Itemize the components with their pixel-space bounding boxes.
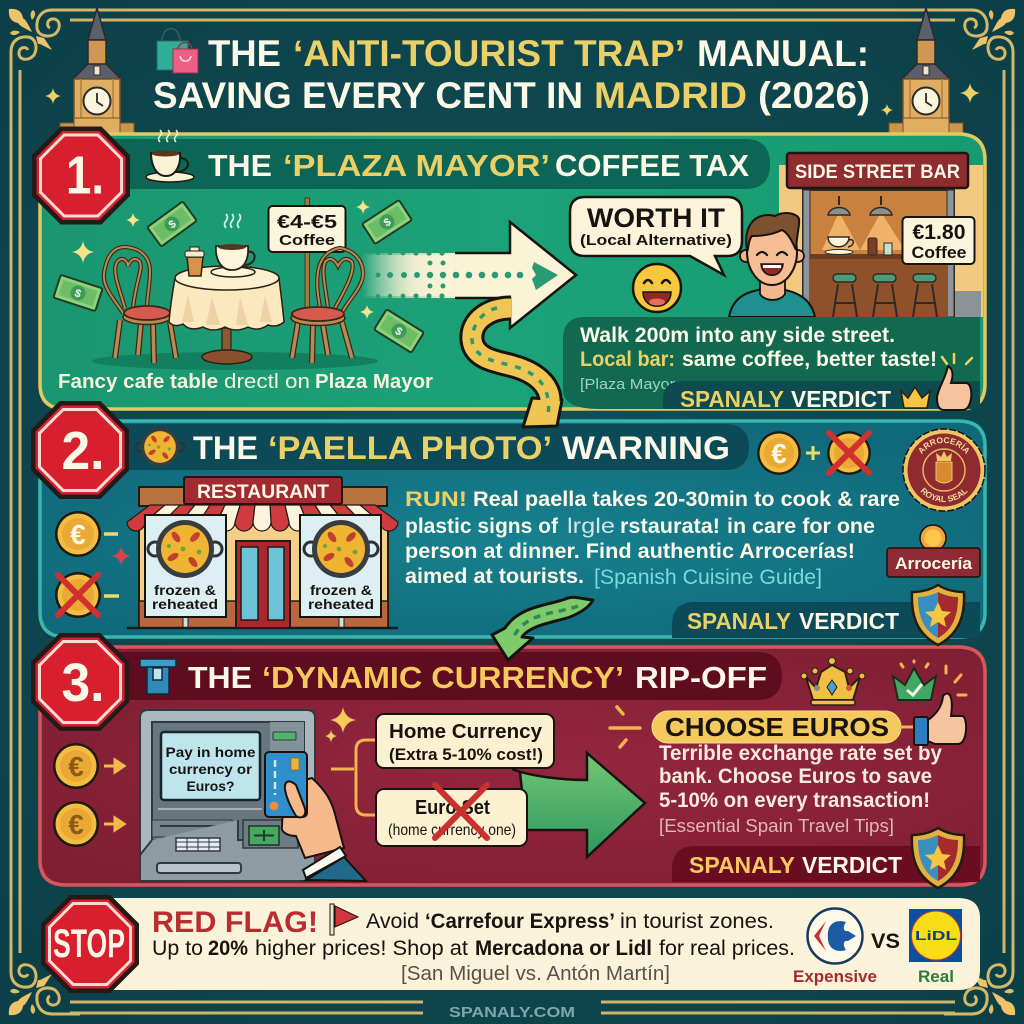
takeaway cup <box>185 247 204 276</box>
panel 1: Plaza Mayor coffee tax <box>40 130 985 412</box>
panel 3: dynamic currency rip-off <box>40 647 985 888</box>
warning body text: plastic signs of <box>405 515 559 538</box>
source citation: [Plaza Mayor <box>580 376 675 393</box>
hand with bank card <box>265 752 366 881</box>
price tag: 1.80 euro coffee: Coffee <box>912 243 966 262</box>
Carrefour logo <box>808 908 862 964</box>
red flag text: 20% <box>208 937 248 960</box>
verdict bar: VERDICT <box>799 608 899 634</box>
label: real: Real <box>918 968 954 986</box>
option: home currency <box>376 714 554 768</box>
poster: frozen and reheated right: frozen & <box>310 582 372 598</box>
versus label: VS <box>871 930 900 953</box>
panel 2 background <box>40 421 985 637</box>
sparkles <box>72 200 374 319</box>
coffee cup on table <box>211 214 255 277</box>
arroceria medal <box>920 525 946 551</box>
ground shadow <box>92 352 378 370</box>
euro coins with arrows: € <box>68 809 84 840</box>
royal seal badge: ROYAL SEAL <box>920 488 968 502</box>
title: ‘ANTI-TOURIST TRAP’ <box>293 33 685 74</box>
poster: frozen and reheated right: reheated <box>308 596 374 612</box>
red flag text: ‘Carrefour Express’ <box>425 910 615 933</box>
panel 1 heading: COFFEE TAX <box>555 148 749 183</box>
floating money bills <box>53 200 424 353</box>
icon: thumbs up <box>937 354 972 410</box>
advice text: same coffee, better taste! <box>682 348 937 371</box>
Lidl logo: LiDL <box>915 928 957 943</box>
panel 3 heading: ‘DYNAMIC CURRENCY’ <box>262 660 624 695</box>
advice text: Local bar: <box>580 348 675 371</box>
icon: shield panel 2 <box>912 585 964 645</box>
number badge 3: 3. <box>62 653 104 713</box>
body text: 5-10% on every transaction! <box>659 789 930 812</box>
option: home currency: (Extra 5-10% cost!) <box>389 745 543 764</box>
ATM screen: Pay in home <box>166 744 256 760</box>
verdict bar <box>663 381 980 412</box>
icon: thumbs up with sleeve <box>914 693 966 745</box>
option: euro crossed out <box>376 785 527 846</box>
cafe table <box>169 266 284 364</box>
red flag text: Mercadona or Lidl <box>475 937 652 960</box>
panel 1 heading strip <box>110 139 770 189</box>
connector lines <box>331 740 376 815</box>
red flag text: higher prices! Shop at <box>255 937 468 960</box>
icon: right clock tower <box>889 8 963 134</box>
number badge 3 <box>32 634 128 730</box>
price sign: 4 to 5 euro coffee: Coffee <box>279 232 335 249</box>
corner ornament: bottom right <box>944 944 1015 1015</box>
panel 3 heading strip <box>110 652 782 700</box>
green arrow <box>512 753 645 857</box>
source citation: [Essential Spain Travel Tips] <box>659 816 894 836</box>
side street bar sign: SIDE STREET BAR <box>795 162 960 183</box>
option: euro crossed out: Euro Set <box>415 797 490 819</box>
icon: shopping bags <box>157 28 198 73</box>
warning body text: RUN! <box>405 488 467 511</box>
title: MADRID <box>594 75 747 116</box>
floating money bills: $ <box>393 325 404 339</box>
option: euro crossed out: (home currency one) <box>388 822 516 839</box>
door <box>236 541 290 628</box>
body text: Terrible exchange rate set by <box>659 742 942 765</box>
source citation: [Spanish Cuisine Guide] <box>594 566 822 589</box>
price tag: 1.80 euro coffee <box>902 217 974 264</box>
ATM screen <box>161 732 260 800</box>
royal seal badge <box>902 428 986 512</box>
red sparkle <box>112 546 130 566</box>
euro coins with arrows <box>53 743 124 847</box>
panel 3 heading: THE <box>188 660 252 695</box>
panel 2 heading: WARNING <box>562 430 730 466</box>
title: (2026) <box>758 75 870 116</box>
panel 2: paella photo warning <box>38 419 987 639</box>
corner ornament: bottom left <box>9 944 80 1015</box>
warning body text: Real paella takes 20-30min to cook & rare <box>473 488 900 511</box>
warning body text: lrgle <box>567 515 615 538</box>
restaurant illustration <box>127 487 398 628</box>
poster: frozen and reheated right <box>300 515 381 617</box>
verdict bar <box>672 846 980 882</box>
footer website: SPANALY.COM <box>449 1004 575 1021</box>
sparkles <box>325 707 356 742</box>
option: home currency: Home Currency <box>389 721 543 743</box>
title: SAVING EVERY CENT IN <box>153 75 583 116</box>
left chair <box>104 247 176 363</box>
panel 2 heading: THE <box>193 430 258 466</box>
red flag text: in tourist zones. <box>620 910 774 933</box>
warning body text: aimed at tourists. <box>405 565 584 588</box>
floating money bills: $ <box>73 287 82 301</box>
panel 3 heading: RIP-OFF <box>635 660 767 695</box>
euro coin with dash <box>55 511 118 557</box>
Lidl logo <box>909 909 962 962</box>
floating money bills: $ <box>167 218 179 231</box>
restaurant sign: RESTAURANT <box>197 482 329 503</box>
poster: frozen and reheated left: reheated <box>152 596 218 612</box>
winding road arrow: plaza to side street <box>472 308 562 427</box>
arroceria label <box>887 548 980 577</box>
number badge 2: 2. <box>62 421 104 481</box>
number badge 1: 1. <box>66 146 104 206</box>
panel 1 heading <box>208 148 749 183</box>
corner ornament: top right <box>944 9 1015 80</box>
panel 2 heading <box>193 430 730 466</box>
speech bubble: worth it <box>570 197 742 275</box>
right chair <box>291 248 363 363</box>
icon: gold crown <box>801 658 865 705</box>
warning body text <box>405 488 900 588</box>
panel 2 heading: ‘PAELLA PHOTO’ <box>268 430 552 466</box>
icon: shield <box>912 828 964 888</box>
caption: fancy cafe table: Plaza Mayor <box>315 371 433 393</box>
ATM machine <box>140 710 315 881</box>
euro coins with arrows: € <box>68 751 84 782</box>
advice text: Walk 200m into any side street. <box>580 324 895 347</box>
speech bubble: worth it: (Local Alternative) <box>580 232 732 249</box>
icon: smiling emoji <box>633 264 681 312</box>
source citation: [San Miguel vs. Antón Martín] <box>401 963 670 985</box>
verdict bar: SPANALY <box>689 852 795 878</box>
warning body text: person at dinner. Find authentic Arrocerías! <box>405 540 855 563</box>
poster: frozen and reheated left <box>145 515 226 617</box>
icon: heading coffee cup <box>146 130 194 182</box>
stop sign <box>42 896 138 992</box>
label: expensive: Expensive <box>793 968 877 986</box>
advice text box <box>563 317 980 409</box>
stop sign: STOP <box>53 922 125 966</box>
verdict bar: VERDICT <box>791 386 891 412</box>
awning <box>127 505 398 532</box>
speech bubble: worth it: WORTH IT <box>587 203 726 233</box>
price sign: 4 to 5 euro coffee <box>268 198 346 308</box>
side street bar interior <box>803 190 981 317</box>
icon: small ATM heading <box>140 659 176 694</box>
arroceria label: Arrocería <box>895 555 973 573</box>
red flag heading: RED FLAG! <box>152 906 318 939</box>
royal seal badge: ARROCERÍA <box>919 437 969 454</box>
side street bar sign <box>787 153 968 188</box>
warning body text: in care for one <box>727 515 875 538</box>
crossed coin with dash <box>55 572 119 618</box>
body text <box>659 742 942 812</box>
advice text <box>580 324 937 371</box>
verdict bar <box>672 602 980 638</box>
panel 2 heading strip <box>110 424 749 470</box>
verdict bar: SPANALY <box>687 608 791 634</box>
icon: small crown <box>901 387 930 408</box>
price tag: 1.80 euro coffee: €1.80 <box>912 221 966 244</box>
choose euros pill <box>610 707 914 747</box>
side street bar background <box>779 165 983 317</box>
arrow: tourist to local alternative <box>362 222 576 328</box>
choose euros pill: CHOOSE EUROS <box>665 712 889 742</box>
ATM screen: currency or <box>169 761 253 777</box>
caption: fancy cafe table <box>58 371 433 393</box>
icon: paella pan heading <box>136 428 184 466</box>
number badge 1 <box>33 128 129 224</box>
verdict bar: SPANALY <box>680 386 784 412</box>
icon: red flag <box>330 904 358 935</box>
sparkles around towers <box>45 83 980 116</box>
title <box>153 33 870 116</box>
caption: fancy cafe table: Fancy cafe table <box>58 371 218 393</box>
panel 3 background <box>40 647 985 885</box>
number badge 2 <box>32 402 128 498</box>
icon: coin plus crossed coin <box>757 431 871 475</box>
title: MANUAL: <box>697 33 869 74</box>
red flag text <box>152 910 795 960</box>
red flag text: for real prices. <box>659 937 795 960</box>
caption: fancy cafe table: drectl on <box>224 371 310 393</box>
red flag text: Up to <box>152 937 203 960</box>
price sign: 4 to 5 euro coffee: €4-€5 <box>277 212 337 232</box>
ATM screen: Euros? <box>186 778 234 794</box>
panel 1 heading: THE <box>208 148 272 183</box>
bottom red flag banner <box>100 898 980 990</box>
poster: frozen and reheated left: frozen & <box>154 582 216 598</box>
euro coin with dash: € <box>70 519 86 550</box>
restaurant sign <box>184 477 342 504</box>
panel 3 heading <box>188 660 767 695</box>
smiling man <box>729 213 815 317</box>
panel 1 background <box>40 134 985 409</box>
banner background <box>100 898 980 990</box>
floating money bills: $ <box>382 216 393 230</box>
warning body text: rstaurata! <box>620 515 720 538</box>
red flag text: Avoid <box>366 910 419 933</box>
icon: coin plus crossed coin: € <box>771 438 787 469</box>
corner ornament: top left <box>9 9 80 80</box>
panel 1 heading: ‘PLAZA MAYOR’ <box>283 148 550 183</box>
winding road arrow: green <box>492 597 593 660</box>
title: THE <box>208 33 281 74</box>
body text: bank. Choose Euros to save <box>659 765 932 788</box>
icon: green crown with check <box>893 661 966 700</box>
verdict bar: VERDICT <box>802 852 902 878</box>
icon: left clock tower <box>60 8 134 134</box>
